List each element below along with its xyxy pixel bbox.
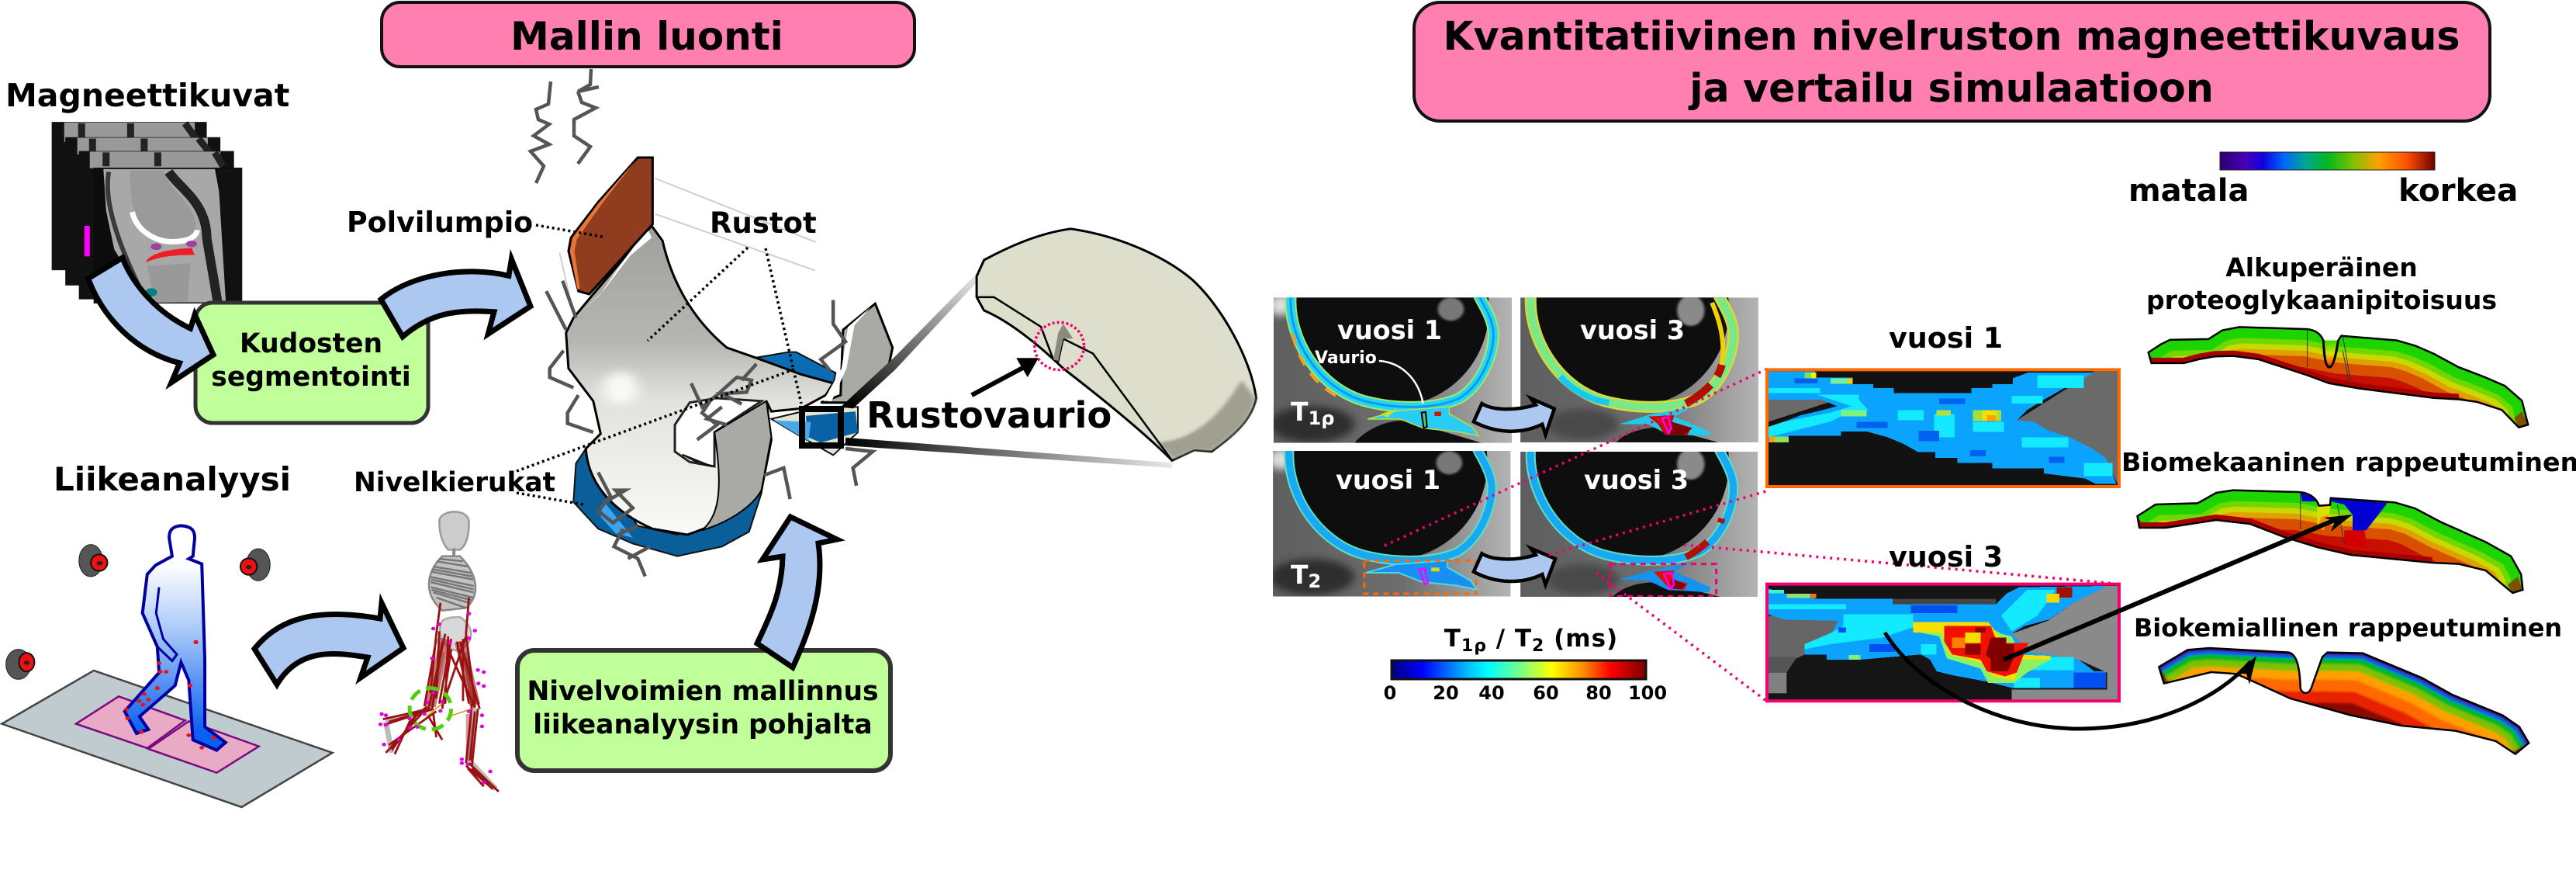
markers — [124, 640, 216, 750]
human figure — [125, 525, 226, 750]
label: Liikeanalyysi: Liikeanalyysi — [54, 460, 291, 498]
arrow: MRI to segmentation — [88, 258, 213, 383]
colour scale T1rho / T2: 80 — [1585, 682, 1612, 704]
force plates — [76, 696, 185, 748]
thin projection lines — [559, 179, 816, 318]
heading: Mallin luonti — [382, 2, 915, 67]
label: Rustot: Rustot — [710, 206, 817, 240]
map labels: T — [1291, 397, 1309, 427]
box: Nivelvoimien mallinnus: Nivelvoimien mallinnus — [527, 676, 879, 707]
label: Alkuperäinen proteoglykaanipitoisuus: proteoglykaanipitoisuus — [2146, 285, 2497, 315]
map labels: 2 — [1309, 570, 1321, 592]
map labels — [1291, 315, 1689, 592]
ligaments — [546, 281, 873, 577]
box: Nivelvoimien mallinnus — [517, 650, 890, 771]
patella — [569, 158, 652, 294]
femoral notch — [675, 398, 762, 466]
medial meniscus — [754, 352, 835, 385]
label: Magneettikuvat: Magneettikuvat — [5, 77, 289, 114]
map labels: vuosi 3 — [1580, 315, 1685, 345]
colour scale T1rho / T2: 20 — [1433, 682, 1459, 704]
force plate floor — [2, 671, 333, 807]
colour scale T1rho / T2: 0 — [1384, 682, 1396, 704]
arrow: T2 progression — [1474, 549, 1555, 584]
panel: T2 year 1 — [1273, 451, 1511, 597]
skeleton — [386, 511, 496, 789]
camera — [6, 650, 34, 679]
defect pointer arrow — [972, 358, 1039, 395]
label: Alkuperäinen proteoglykaanipitoisuus: Alkuperäinen — [2225, 252, 2418, 283]
cartilage model: original proteoglycan — [2144, 321, 2533, 432]
heading: Kvantitatiivinen nivelruston magneettikuvaus — [1414, 2, 2490, 121]
panel: T2 year 3 — [1520, 452, 1758, 597]
label: Biokemiallinen rappeutuminen: Biokemiallinen rappeutuminen — [2134, 613, 2562, 643]
label: vuosi 1: vuosi 1 — [1889, 321, 2003, 355]
knee model — [546, 158, 893, 577]
medial condyle side — [821, 303, 893, 403]
map labels: 1ρ — [1309, 407, 1334, 429]
map labels: T — [1291, 560, 1309, 590]
femoral cartilage — [566, 226, 833, 535]
label: Nivelkierukat: Nivelkierukat — [354, 467, 555, 498]
MRI image stack — [52, 122, 242, 303]
lateral condyle side — [702, 401, 771, 530]
label: Biomekaaninen rappeutuminen: Biomekaaninen rappeutuminen — [2121, 447, 2576, 477]
arrow: joint forces to model — [757, 517, 837, 667]
motion capture scene — [2, 525, 333, 807]
colour scale T1rho / T2: / T — [1487, 625, 1532, 653]
highlight square — [802, 409, 841, 445]
MRI relaxation maps — [1268, 212, 1758, 597]
zoom beams to cartilage defect — [841, 273, 1172, 468]
colour scale T1rho / T2: T — [1444, 625, 1461, 653]
rainbow colour scale: korkea — [2398, 172, 2518, 209]
arrow: year 3 map to biochemical model — [1885, 633, 2256, 729]
arrow: T1rho progression — [1474, 398, 1554, 435]
arrow: year 3 hotspot to biomechanical model — [2004, 515, 2353, 660]
rainbow colour scale: matala — [2128, 173, 2249, 209]
camera — [240, 549, 270, 581]
tibial cartilage piece — [771, 407, 858, 455]
lateral meniscus — [573, 449, 764, 556]
box: Kudosten segmentointi: segmentointi — [211, 362, 411, 393]
label: vuosi 3: vuosi 3 — [1889, 540, 2003, 574]
zoomed map year 3 — [1767, 584, 2119, 701]
label: Polvilumpio: Polvilumpio — [347, 206, 533, 239]
map labels: vuosi 1 — [1336, 465, 1440, 495]
box: Kudosten segmentointi: Kudosten — [240, 328, 382, 359]
top ligaments — [531, 69, 599, 183]
cartilage model: biomechanical degeneration — [2132, 487, 2529, 598]
colour scale T1rho / T2: 100 — [1628, 682, 1667, 704]
box: Nivelvoimien mallinnus: liikeanalyysin pohjalta — [533, 709, 873, 740]
heading: Kvantitatiivinen nivelruston magneettikuvaus: Kvantitatiivinen nivelruston magneettikuvaus — [1444, 13, 2460, 59]
colour scale T1rho / T2: 1ρ — [1461, 636, 1487, 656]
zoomed cartilage with defect — [972, 229, 1256, 460]
white defect pointer — [1379, 361, 1423, 404]
arrow: segmentation to model — [381, 259, 531, 337]
cartilage model: biochemical degeneration — [2156, 644, 2533, 758]
camera — [79, 545, 108, 577]
muscles — [383, 598, 499, 792]
box: Kudosten segmentointi — [195, 303, 428, 423]
virtual markers — [379, 612, 493, 785]
map labels: vuosi 3 — [1584, 465, 1689, 495]
rainbow colour scale — [2128, 152, 2518, 209]
dotted leader lines — [517, 225, 801, 504]
colour scale T1rho / T2: 2 — [1532, 636, 1544, 656]
zoomed map year 1 — [1767, 369, 2119, 487]
label: Rustovaurio: Rustovaurio — [866, 394, 1112, 436]
heading: Mallin luonti: Mallin luonti — [510, 14, 783, 59]
dotted pink connector lines — [1385, 369, 2115, 701]
green knee highlight — [410, 688, 451, 730]
colour scale T1rho / T2: 60 — [1533, 682, 1559, 704]
colour scale T1rho / T2: (ms) — [1544, 625, 1618, 653]
map labels: Vaurio — [1315, 348, 1377, 368]
panel: T1rho year 3 — [1520, 297, 1758, 442]
musculoskeletal model — [379, 511, 499, 792]
colour scale T1rho / T2 — [1384, 625, 1667, 704]
colour scale T1rho / T2: 40 — [1478, 682, 1505, 704]
arrow: motion analysis to musculoskeletal model — [254, 603, 403, 685]
heading: Kvantitatiivinen nivelruston magneettikuvaus: ja vertailu simulaatioon — [1688, 65, 2214, 111]
map labels: vuosi 1 — [1337, 315, 1442, 345]
panel: T1rho year 1 — [1274, 297, 1512, 443]
